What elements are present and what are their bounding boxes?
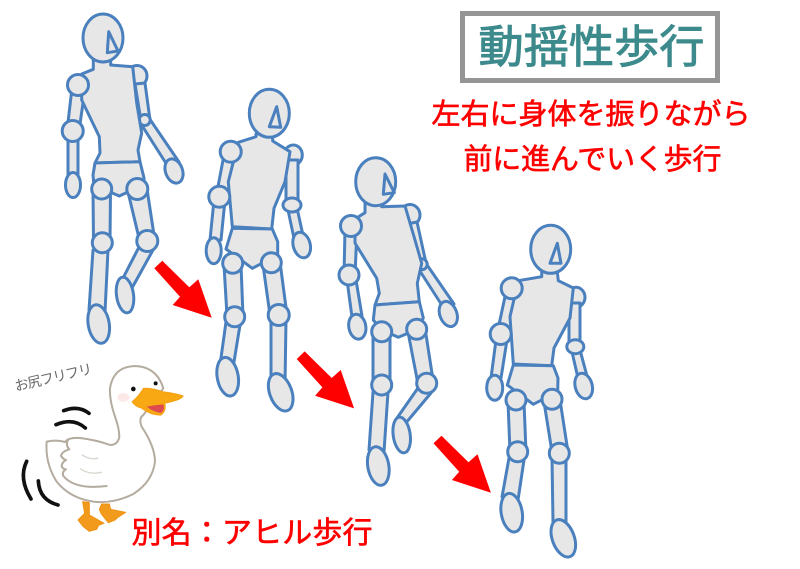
arrow 1	[154, 261, 212, 318]
illustration: duck	[23, 366, 183, 531]
duck cheek	[117, 393, 129, 402]
duck wing	[61, 439, 107, 487]
duck eyes	[131, 381, 158, 391]
duck mouth	[147, 404, 164, 413]
arrow 2	[297, 351, 354, 408]
duck beak	[132, 388, 183, 415]
duck body	[46, 366, 163, 502]
description text	[432, 98, 750, 176]
alternate name label: 別名：アヒル歩行	[132, 517, 372, 550]
title box: 動揺性歩行	[478, 22, 704, 72]
figure 4: walking mannequin	[487, 225, 595, 560]
arrow 3	[434, 436, 491, 493]
description text: 前に進んでいく歩行	[464, 143, 722, 176]
motion lines	[23, 408, 89, 505]
figure 2: walking mannequin	[206, 89, 313, 414]
duck feet	[78, 502, 126, 531]
duck feathers	[81, 455, 102, 473]
title box	[462, 14, 718, 80]
caption: wiggling bottom: お尻フリフリ	[13, 361, 94, 394]
description text: 左右に身体を振りながら	[432, 98, 750, 131]
figure 1: walking mannequin	[62, 14, 186, 345]
figure 3: walking mannequin	[339, 158, 461, 487]
